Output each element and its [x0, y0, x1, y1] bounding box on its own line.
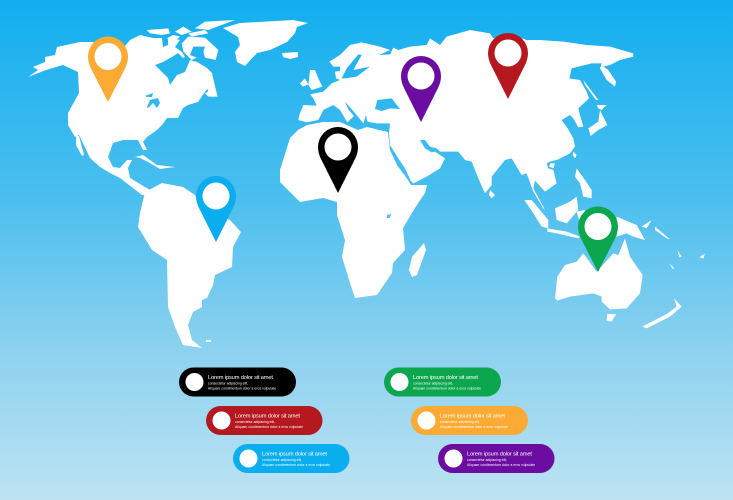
legend pill: black: consectetur adipiscing elit, [208, 382, 248, 386]
africa [280, 122, 427, 298]
legend pill: purple [438, 444, 554, 473]
caribbean islands [135, 155, 175, 169]
madagascar [409, 243, 426, 277]
iceland [282, 52, 298, 59]
legend pill: black [179, 368, 296, 396]
legend pill: orange: consectetur adipiscing elit, [440, 420, 480, 424]
southeast asia and oceania [524, 197, 705, 269]
baja california [76, 136, 84, 156]
north america [28, 35, 217, 195]
pin: purple, europe [401, 56, 441, 122]
legend pill: green: Lorem ipsum dolor sit amet [413, 375, 478, 381]
legend pill: green: consectetur adipiscing elit, [413, 382, 453, 386]
legend pill: green [384, 368, 501, 396]
legend pill: red [206, 406, 322, 435]
new zealand [642, 298, 682, 328]
pin: black, africa [318, 127, 358, 193]
legend pill: black: Lorem ipsum dolor sit amet [208, 375, 273, 381]
pin: blue, south america [196, 176, 236, 242]
legend pill: purple: consectetur adipiscing elit, [467, 458, 507, 462]
europe and asia islands [300, 70, 607, 198]
legend pill: orange: Aliquam condimentum dolor a eros vulputate [440, 425, 508, 429]
legend pill: red: consectetur adipiscing elit, [235, 420, 275, 424]
legend pill: blue: consectetur adipiscing elit, [262, 458, 302, 462]
greenland [223, 20, 308, 66]
legend pill: blue: Lorem ipsum dolor sit amet [262, 452, 327, 458]
legend pill: orange [411, 406, 528, 435]
south america [138, 183, 241, 348]
legend pill: red: Aliquam condimentum dolor a eros vulputate [235, 425, 303, 429]
legend pill: green: Aliquam condimentum dolor a eros vulputate [413, 386, 481, 390]
australia [555, 238, 643, 322]
pin: green, australia [578, 206, 618, 272]
world map [28, 20, 705, 348]
legend pill: purple: Lorem ipsum dolor sit amet [467, 452, 532, 458]
legend pill: blue [233, 444, 350, 473]
pin: red, asia [488, 33, 528, 99]
legend pill: red: Lorem ipsum dolor sit amet [235, 414, 300, 420]
arctic islands [147, 20, 235, 97]
legend pill: orange: Lorem ipsum dolor sit amet [440, 414, 505, 420]
legend pill: purple: Aliquam condimentum dolor a eros vulputate [467, 463, 535, 467]
pin: orange, north america [88, 36, 128, 102]
eurasia [298, 30, 633, 210]
legend pill: blue: Aliquam condimentum dolor a eros vulputate [262, 463, 330, 467]
legend pill: black: Aliquam condimentum dolor a eros vulputate [208, 386, 276, 390]
